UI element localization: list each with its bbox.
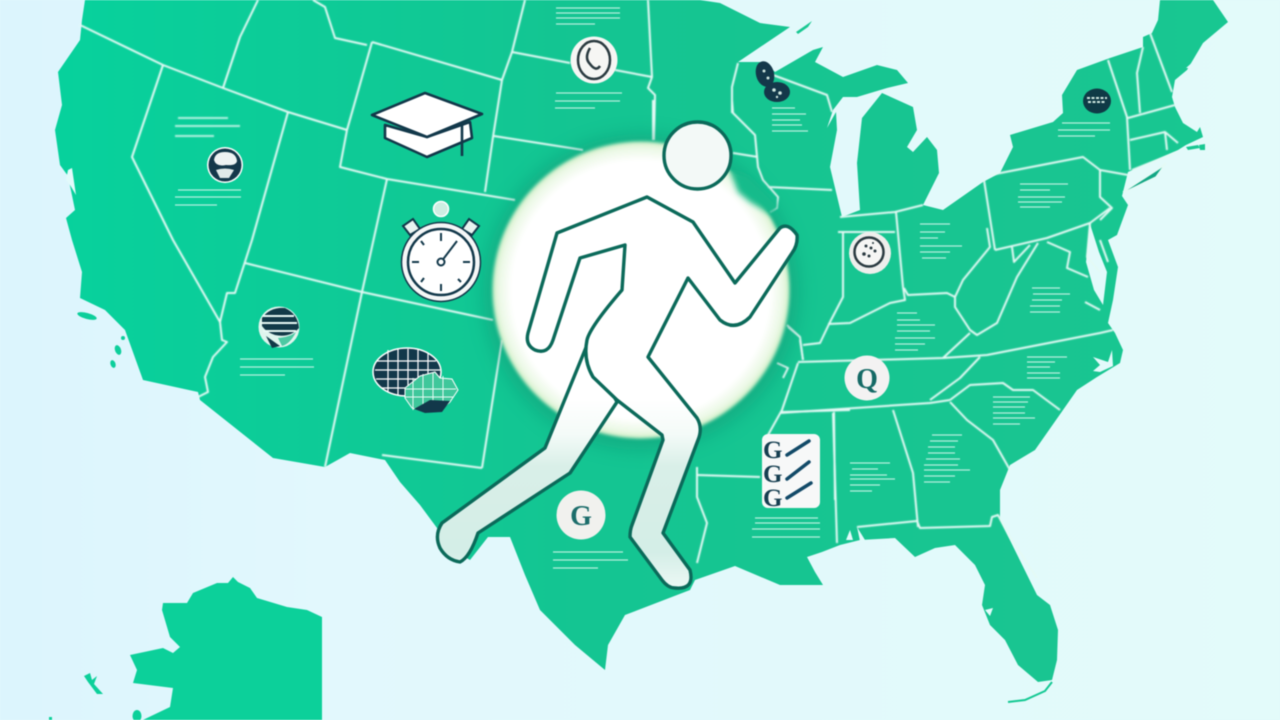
text: New York (1058, 123, 1110, 136)
text: Kentucky (895, 313, 935, 350)
icon: dark badge, New York (1083, 88, 1111, 114)
text blocks on states (175, 8, 1110, 568)
torso and front leg (527, 197, 797, 588)
text: Pennsylvania (1018, 184, 1068, 207)
text: Ohio (920, 224, 962, 258)
islands: Alaska (49, 673, 142, 720)
text: South Carolina (993, 397, 1035, 424)
text: Nevada lower (175, 190, 241, 205)
icon: badge, Dakotas (570, 36, 618, 84)
text: Arizona (240, 359, 314, 375)
text: Alabama (850, 463, 895, 491)
text: North Dakota (556, 8, 620, 24)
icon: brain badge, Nevada (207, 147, 243, 183)
water cut-ins (66, 41, 1212, 616)
islands: California (77, 311, 125, 369)
icon: letter badge, Texas: G (570, 501, 592, 532)
text: South Dakota (555, 93, 622, 108)
text: Georgia (924, 435, 970, 482)
Florida Keys (1008, 682, 1052, 702)
icon: dotted badge, Indiana (849, 232, 891, 274)
icon: striped globe, Arizona (258, 306, 300, 348)
head (664, 122, 731, 189)
icon: dark blobs, Wisconsin (753, 59, 790, 102)
shadow around central disk (483, 134, 799, 450)
icon: checklist card: G (763, 485, 782, 512)
islands: Nantucket and Isle Royale (796, 21, 1205, 150)
text: Nevada upper (175, 118, 240, 136)
icon: letter badge, Texas (556, 490, 606, 540)
text: Wisconsin (772, 108, 808, 131)
icon: checklist card (762, 434, 820, 512)
icon: graduation cap (372, 93, 482, 157)
text: North Carolina (1027, 357, 1067, 378)
icon: mesh globes (373, 348, 458, 413)
island: Long Island (1123, 163, 1166, 192)
central glowing disk (492, 142, 790, 438)
map patch biting into disk near head (730, 170, 778, 214)
icon: letter badge, Tennessee (844, 356, 890, 400)
icon: letter badge, Tennessee: Q (856, 364, 878, 395)
running figure (437, 122, 797, 588)
text: Mississippi (752, 518, 820, 537)
icon: checklist card: G (763, 461, 782, 488)
map: Alaska (130, 577, 322, 720)
text: Texas (553, 552, 628, 568)
text: Virginia (1030, 288, 1070, 312)
back leg (437, 345, 617, 562)
icon: checklist card: G (763, 437, 782, 464)
state borders (80, 0, 1178, 578)
icon: stopwatch (402, 202, 480, 302)
